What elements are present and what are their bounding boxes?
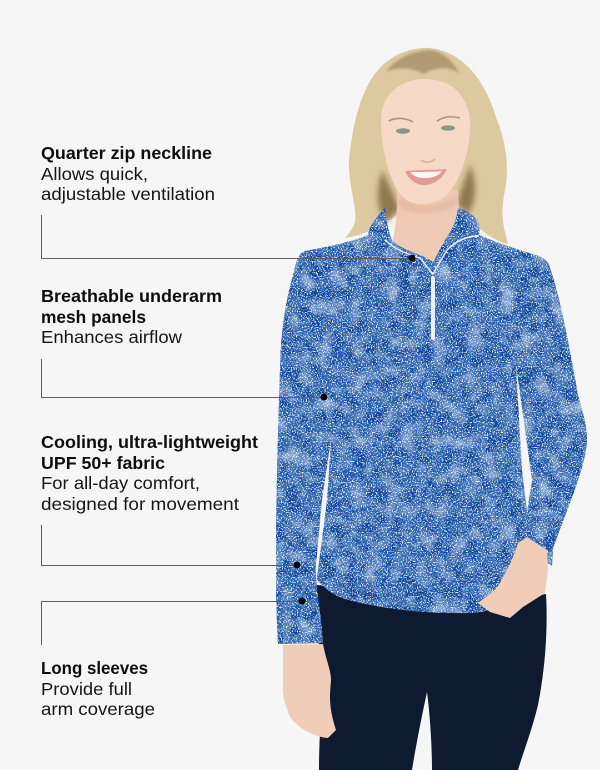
feature: cooling UPF 50+ fabric: For all-day comfort,: [41, 473, 200, 493]
feature: breathable underarm mesh panels: Enhances airflow: [41, 327, 182, 347]
neck: [392, 190, 466, 278]
feature: long sleeves: [41, 658, 155, 719]
feature: cooling UPF 50+ fabric: designed for movement: [41, 494, 239, 514]
face: [381, 79, 470, 204]
feature: breathable underarm mesh panels: [41, 286, 222, 347]
trousers: [316, 585, 547, 770]
zipper: [431, 278, 435, 338]
leader line: quarter zip: [42, 215, 415, 261]
shirt: [270, 200, 595, 650]
feature: cooling UPF 50+ fabric: [41, 432, 258, 514]
feature: long sleeves: Long sleeves: [41, 658, 148, 678]
neck shadow: [398, 195, 458, 213]
nose: [421, 159, 435, 162]
right hand: [478, 537, 548, 618]
shirt inside collar: [458, 208, 479, 235]
leader line: underarm mesh: [42, 359, 327, 400]
teeth: [410, 171, 442, 178]
photo: woman modelling the top: [270, 48, 595, 770]
eyebrow right: [437, 117, 460, 121]
feature: breathable underarm mesh panels: mesh panels: [41, 307, 146, 327]
eye left: [396, 128, 410, 134]
feature: breathable underarm mesh panels: Breathable underarm: [41, 286, 222, 306]
feature: quarter zip neckline: [41, 143, 215, 204]
eyebrow left: [389, 118, 413, 122]
feature: cooling UPF 50+ fabric: Cooling, ultra-lightweight: [41, 432, 258, 452]
feature: quarter zip neckline: Quarter zip neckline: [41, 143, 212, 163]
mouth: [405, 169, 447, 185]
gap between left sleeve and torso: [316, 440, 331, 580]
left hand: [283, 644, 336, 738]
hair shadow under jaw: [378, 165, 475, 222]
feature: cooling UPF 50+ fabric: UPF 50+ fabric: [41, 453, 165, 473]
hair parting shade: [386, 50, 460, 74]
gap between right sleeve and torso: [516, 365, 532, 512]
collar edge: [385, 236, 479, 274]
feature: long sleeves: arm coverage: [41, 699, 155, 719]
feature: long sleeves: Provide full: [41, 679, 132, 699]
leader line: long sleeves: [42, 597, 306, 645]
feature: quarter zip neckline: Allows quick,: [41, 164, 148, 184]
leader line: fabric: [42, 525, 300, 568]
hair: [345, 48, 508, 244]
feature: quarter zip neckline: adjustable ventilation: [41, 184, 215, 204]
eye right: [441, 125, 455, 131]
